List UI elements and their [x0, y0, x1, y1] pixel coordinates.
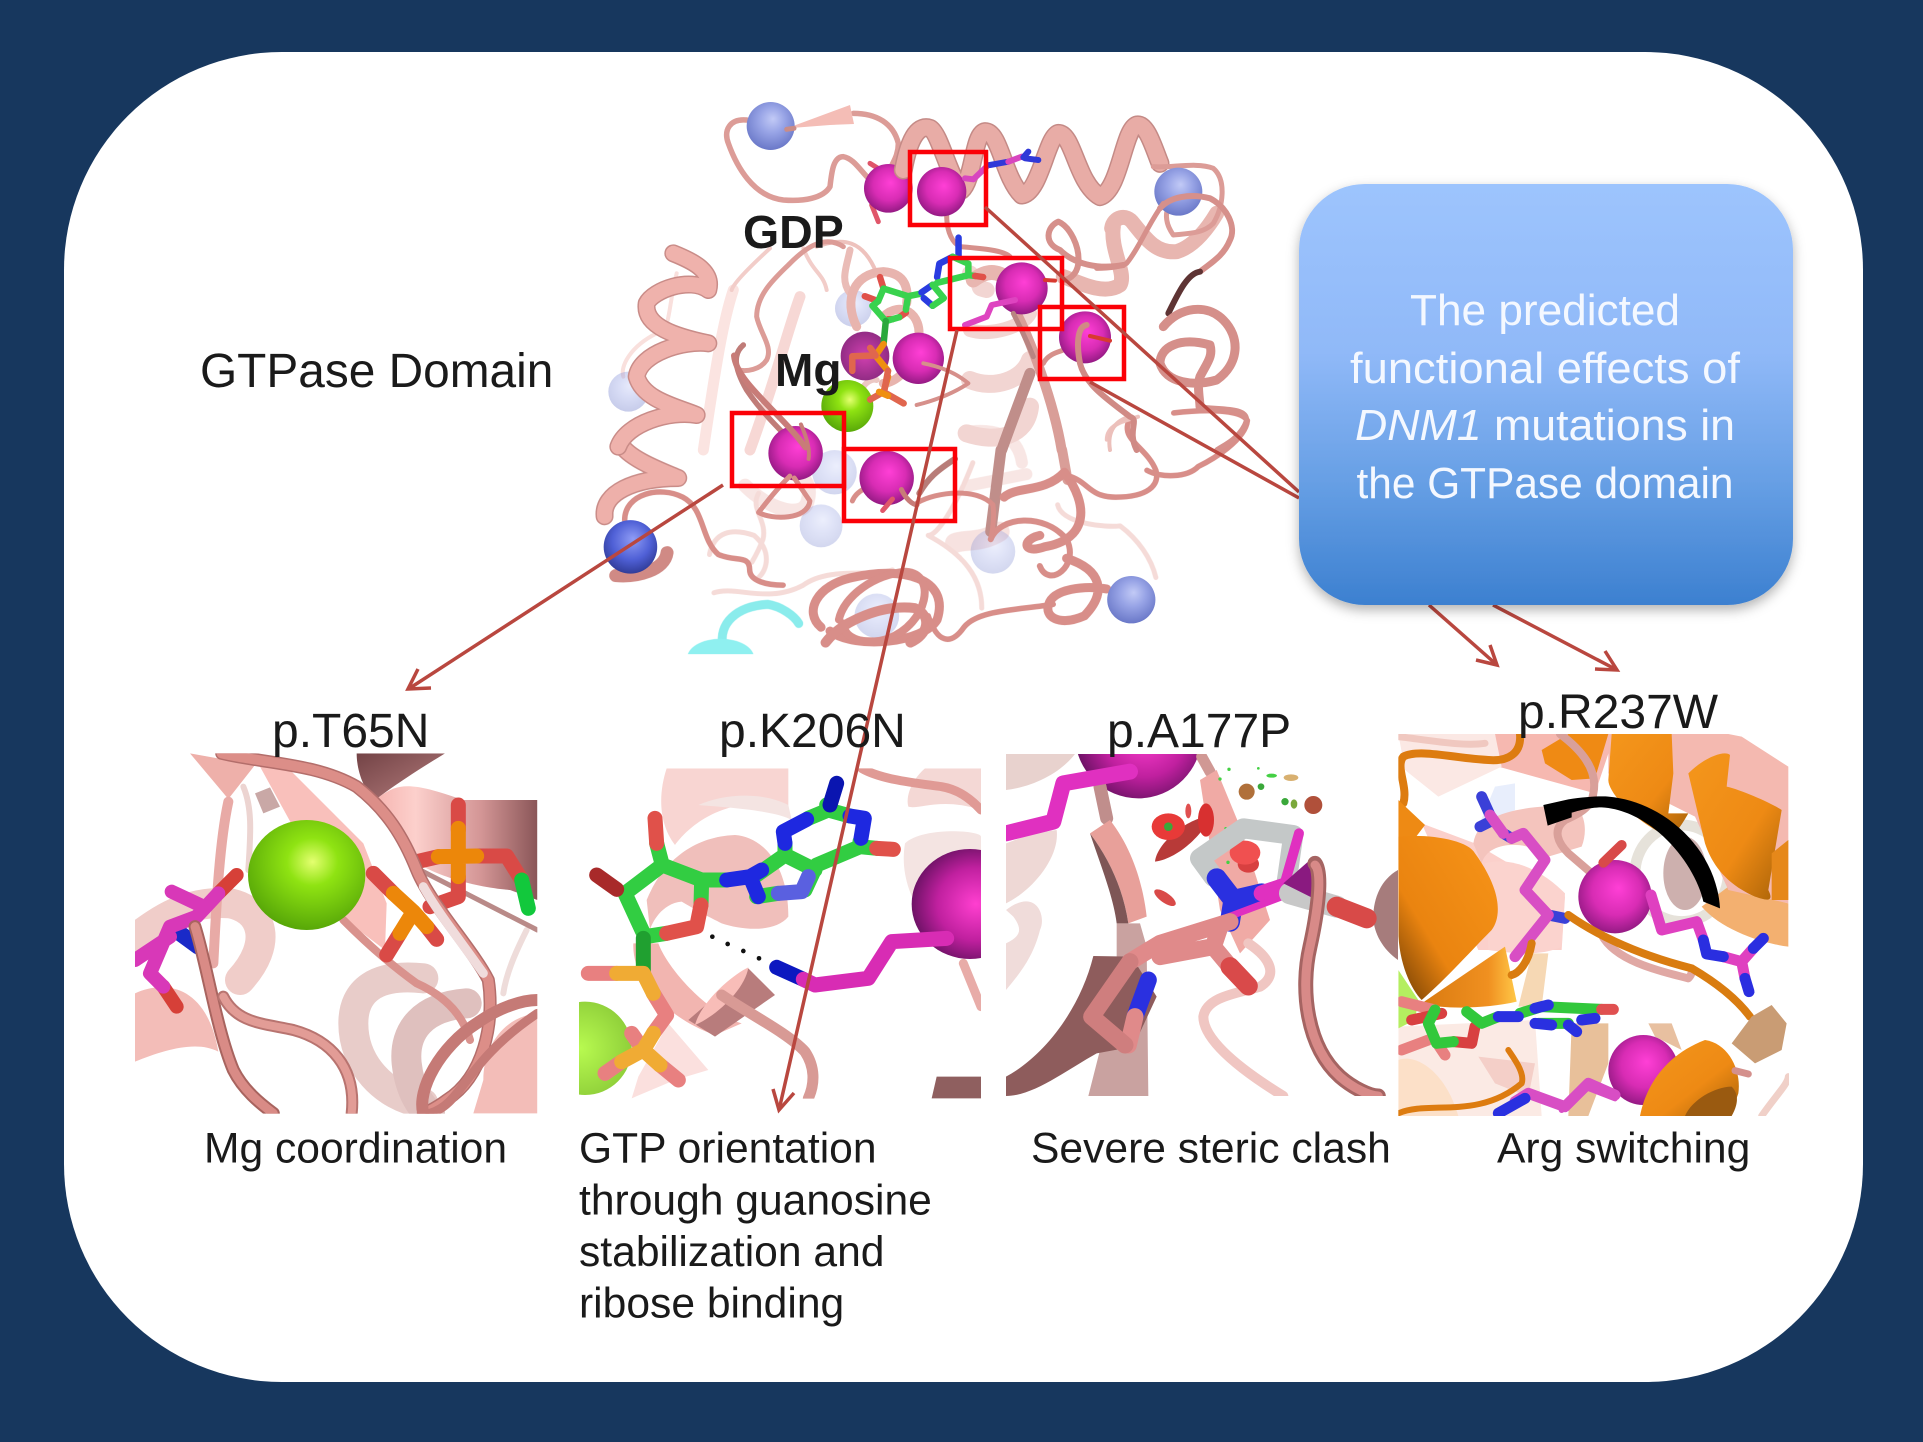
faded sheets and loops	[623, 242, 877, 450]
side chain box 2	[965, 300, 1015, 325]
solid ribbon loops	[195, 753, 537, 1113]
dark helix upper right	[357, 753, 537, 930]
right orange and pink helices	[1608, 734, 1788, 947]
proline sticks	[1200, 828, 1367, 922]
faded back ribbons	[709, 431, 1156, 608]
callout box	[1299, 184, 1793, 605]
lysine stick	[777, 938, 947, 985]
loops over sphere	[734, 356, 917, 517]
faded right sheets	[967, 273, 1030, 438]
front right loops	[917, 196, 1247, 450]
left arginine stick	[1480, 797, 1565, 957]
orange and pink loops	[1512, 915, 1750, 1017]
GDP and phosphate sticks	[852, 238, 983, 403]
pale sheets	[190, 753, 387, 963]
label: p.K206N: p.K206N	[719, 705, 906, 758]
callout text	[1350, 286, 1741, 508]
strands	[1006, 757, 1283, 1096]
lower magenta stick	[1498, 1083, 1615, 1113]
caption: GTP orientation: through guanosine	[579, 1176, 932, 1224]
top helix	[903, 125, 1160, 197]
GDP sticks	[588, 783, 893, 1080]
blue sphere	[747, 102, 795, 150]
magenta spheres upper left	[821, 163, 944, 432]
top centre orange	[1542, 734, 1608, 780]
loops	[722, 768, 981, 1098]
wing strand	[787, 105, 854, 128]
panel: p.A177P close-up	[1006, 754, 1398, 1096]
back right loop and blue sphere	[1153, 165, 1222, 235]
top left loops	[1398, 734, 1594, 873]
loops in front of spheres	[1013, 313, 1137, 450]
callout text: the GTPase domain	[1356, 459, 1734, 508]
left orange helices	[1398, 800, 1517, 1028]
label: GDP: GDP	[743, 206, 844, 258]
right arginine stick	[1651, 895, 1763, 992]
lysine sphere clipped	[912, 849, 981, 959]
lower sphere and helix	[1608, 1035, 1748, 1116]
lower tail ribbon	[616, 553, 667, 576]
central sheets continued	[991, 450, 1067, 532]
heading: GTPase Domain: GTPase Domain	[200, 345, 553, 398]
label: p.T65N: p.T65N	[272, 705, 429, 758]
side chain top	[965, 152, 1038, 179]
panel: p.K206N close-up	[579, 768, 981, 1099]
caption: GTP orientation: ribose binding	[579, 1280, 844, 1328]
lower solid ribbons	[604, 411, 1247, 643]
GDP curl	[851, 272, 919, 383]
label: Mg: Mg	[775, 344, 841, 396]
pale helices	[135, 903, 537, 1113]
salmon sticks	[1092, 922, 1248, 1045]
faded spheres	[800, 450, 1015, 638]
red highlight boxes	[732, 152, 1124, 521]
caption: GTP orientation: stabilization and	[579, 1228, 884, 1276]
callout text: The predicted	[1410, 286, 1680, 335]
mid right faded helix	[973, 213, 1217, 289]
magenta spheres lower	[768, 426, 914, 511]
magenta chain	[1006, 772, 1130, 833]
magnesium sphere clipped	[579, 1002, 632, 1095]
central sheets	[1002, 313, 1062, 450]
pale background structure	[1398, 734, 1788, 1116]
cyan neighbouring chain	[688, 600, 804, 654]
caption: Severe steric clash: Severe steric clash	[1031, 1124, 1391, 1172]
magnesium sphere	[248, 820, 365, 930]
arrow: callout to p.A177P	[1429, 605, 1497, 665]
blue spheres lower	[604, 520, 1155, 623]
pale helices	[632, 768, 981, 1098]
tan sheet	[1732, 1005, 1787, 1063]
phosphate sticks	[373, 805, 528, 955]
label: p.R237W: p.R237W	[1518, 686, 1719, 739]
caption: Mg coordination: Mg coordination	[204, 1124, 507, 1172]
magenta residue sticks	[135, 875, 237, 1007]
GDP sticks	[1402, 1002, 1613, 1055]
pale background ribbons	[1006, 754, 1398, 990]
black arrow: arginine switching	[1543, 796, 1720, 908]
callout text: DNM1 mutations in	[1355, 401, 1735, 450]
hydrogen bond dots	[710, 934, 761, 961]
callout text: functional effects of	[1350, 344, 1741, 393]
arginine sphere	[1578, 860, 1652, 933]
panel: p.T65N close-up	[135, 753, 537, 1113]
caption: GTP orientation: GTP orientation	[579, 1124, 877, 1172]
dark loop	[1306, 863, 1378, 1096]
left helix	[618, 253, 709, 447]
arrow: domain to p.T65N	[408, 485, 723, 689]
magenta sphere clipped	[1078, 754, 1197, 798]
magenta spheres right	[917, 167, 1111, 363]
panel: p.R237W close-up	[1398, 734, 1788, 1116]
protein structure: GTPase domain	[604, 102, 1247, 677]
arrow: callout to p.R237W	[1493, 605, 1617, 670]
arrows: domain boxes to callout	[985, 207, 1299, 498]
label: p.A177P: p.A177P	[1107, 705, 1291, 758]
grey background rings	[1635, 825, 1728, 922]
steric clash discs	[1152, 767, 1322, 909]
upper left loop	[727, 113, 898, 447]
arrow: domain to p.K206N	[773, 330, 957, 1110]
caption: Arg switching: Arg switching	[1497, 1124, 1750, 1172]
